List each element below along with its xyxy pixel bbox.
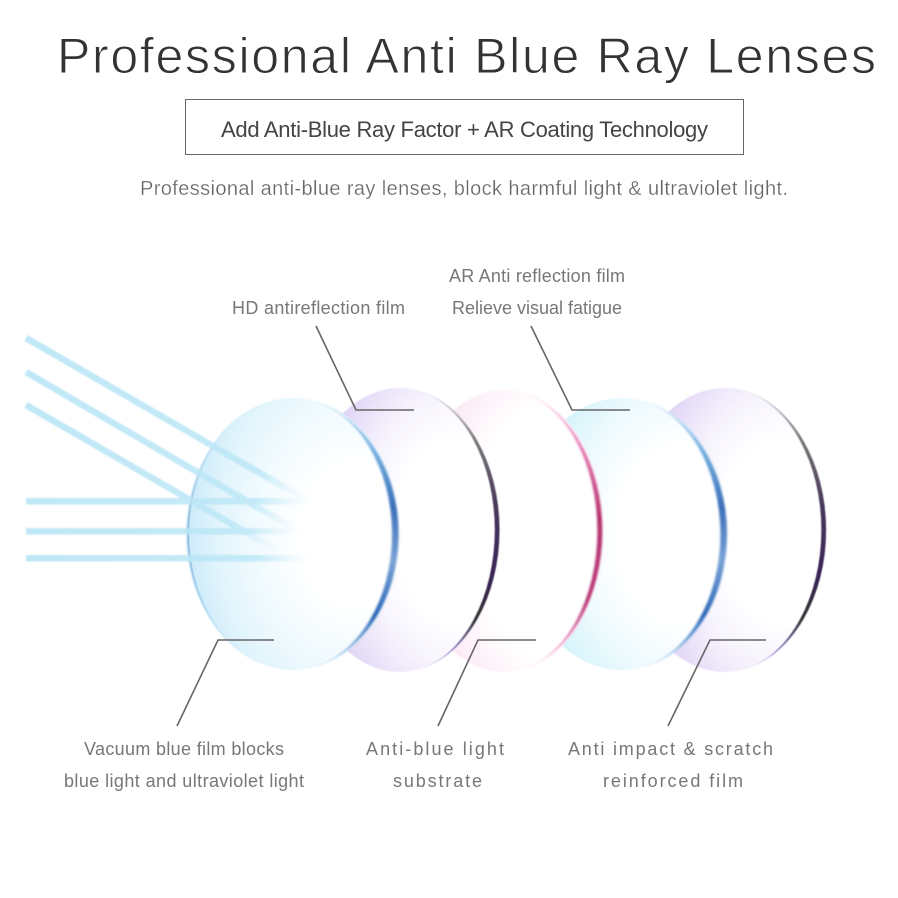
blue light rays [26,338,314,562]
technology callout box [186,100,744,154]
lens: pink anti-blue substrate [406,390,604,672]
label: anti impact and scratch film: Anti impact & scratch [568,739,773,759]
leader line: vacuum blue film [177,640,274,726]
lens: rear purple reinforced film [623,388,827,672]
label: vacuum blue film [64,739,304,791]
lens: cyan AR film [517,398,727,670]
technology callout box: Add Anti-Blue Ray Factor + AR Coating Technology [221,117,708,142]
subtitle: Professional anti-blue ray lenses, block harmful light & ultraviolet light. [140,178,788,200]
title: Professional Anti Blue Ray Lenses [57,28,876,84]
leader line: AR anti reflection film [531,326,630,410]
leader line: anti impact film [668,640,766,726]
label: anti-blue light substrate: substrate [393,771,482,791]
label: anti impact and scratch film [568,739,773,791]
label: AR anti reflection film [449,266,625,318]
label: anti-blue light substrate [366,739,504,791]
label: HD antireflection film: HD antireflection film [232,298,405,318]
label: AR anti reflection film: Relieve visual fatigue [452,298,622,318]
lens: front blue vacuum film [186,398,400,670]
label: anti-blue light substrate: Anti-blue light [366,739,504,759]
label: AR anti reflection film: AR Anti reflection film [449,266,625,286]
leader line: anti-blue substrate [438,640,536,726]
lens stack [186,388,827,672]
label: vacuum blue film: blue light and ultraviolet light [64,771,304,791]
label: vacuum blue film: Vacuum blue film blocks [84,739,284,759]
label: anti impact and scratch film: reinforced film [603,771,743,791]
leader line: HD antireflection film [316,326,414,410]
lens: purple HD antireflection film [300,388,500,672]
